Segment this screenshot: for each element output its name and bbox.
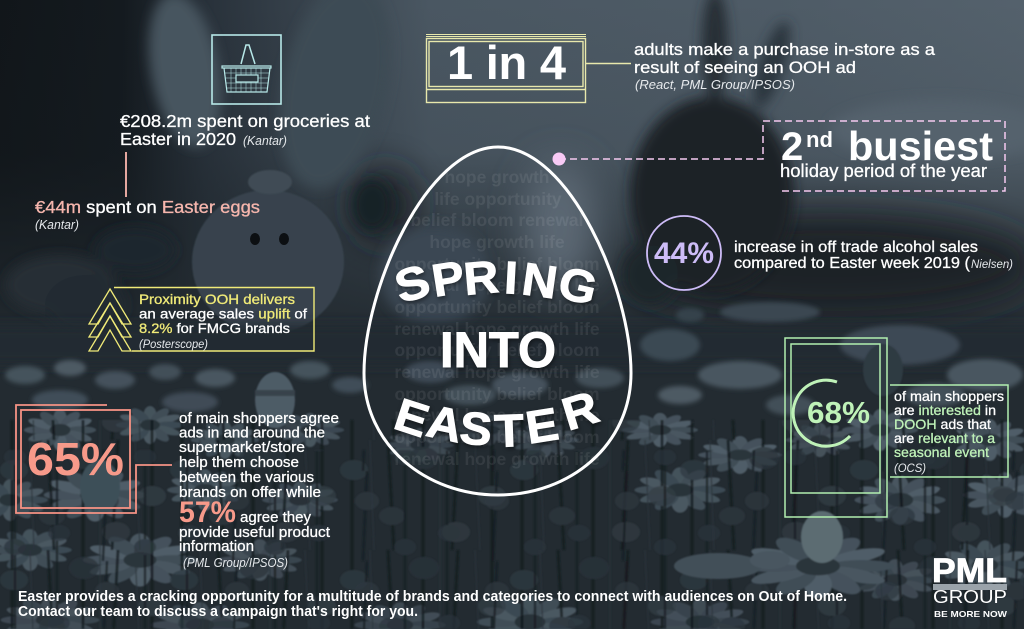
ghost word pattern inside egg: hope growth life xyxy=(429,232,565,252)
stat: alcohol sales text: increase in off trade alcohol sales xyxy=(734,239,978,256)
title: Spring Into Easter: S xyxy=(458,401,494,456)
stat: shoppers choose brands text xyxy=(179,410,339,570)
ghost word pattern inside egg: renewal hope growth life xyxy=(394,405,600,425)
stat: DOOH interest text: of main shoppers xyxy=(894,388,1004,404)
title: Spring Into Easter: S xyxy=(389,255,436,314)
closing message: Contact our team to discuss a campaign that's right for you. xyxy=(18,604,418,620)
title: Spring Into Easter: E xyxy=(389,388,435,447)
stat: shoppers choose brands text: between the various xyxy=(179,469,314,486)
logo: PML Group: BE MORE NOW xyxy=(934,609,1008,619)
stat: groceries spend: Easter in 2020 xyxy=(120,129,236,149)
title: Spring Into Easter: R xyxy=(461,250,501,305)
panel: 1 in 4 box xyxy=(426,34,631,102)
closing message xyxy=(18,589,847,620)
title: Spring Into Easter: E xyxy=(522,397,562,453)
stat: groceries spend: (Kantar) xyxy=(243,133,287,148)
title: Spring Into Easter: R xyxy=(556,381,604,440)
stat: shoppers choose brands text: brands on offer while xyxy=(179,484,321,501)
stat: DOOH interest text: are interested in xyxy=(894,402,996,418)
ghost word pattern inside egg: belief bloom renewal xyxy=(410,210,584,230)
stat: in-store purchase text: (React, PML Group/IPSOS) xyxy=(635,77,795,92)
closing message: Easter provides a cracking opportunity for a multitude of brands and categories to connect with audiences on Out of Home. xyxy=(18,589,847,605)
panel: 68% frame and arc xyxy=(785,338,887,517)
stat: shoppers choose brands text: agree they xyxy=(240,509,311,526)
title: Spring Into Easter: I xyxy=(503,251,519,304)
stat: 44% circle xyxy=(647,216,721,290)
icon: triple up chevrons xyxy=(89,289,131,351)
panel: proximity OOH uplift xyxy=(89,288,314,351)
panel: 2nd busiest dashed box: holiday period of the year xyxy=(780,161,987,181)
stat: shoppers choose brands text: ads in and around the xyxy=(179,424,325,442)
panel: proximity OOH uplift: Proximity OOH delivers xyxy=(139,291,295,307)
stat: Easter eggs spend: €44m spent on Easter eggs xyxy=(35,197,260,217)
stat: shoppers choose brands text: of main shoppers agree xyxy=(179,410,339,427)
title: Spring Into Easter xyxy=(389,250,604,457)
stat: Easter eggs spend: (Kantar) xyxy=(35,217,79,232)
panel: 1 in 4 box: 1 in 4 xyxy=(447,36,566,89)
stat: groceries spend: €208.2m spent on groceries at xyxy=(120,111,370,131)
panel: 65% box: 65% xyxy=(27,433,124,485)
panel: 65% box xyxy=(16,405,172,513)
stat: in-store purchase text: result of seeing an OOH ad xyxy=(634,58,856,77)
stat: in-store purchase text: adults make a purchase in-store as a xyxy=(634,40,936,59)
stat: DOOH interest text: (OCS) xyxy=(894,461,926,475)
ghost word pattern inside egg: opportunity belief bloom xyxy=(394,297,600,317)
panel: 2nd busiest dashed box xyxy=(552,121,1005,191)
stat: shoppers choose brands text: information xyxy=(179,538,254,555)
ghost word pattern inside egg: hope growth xyxy=(445,167,549,187)
stat: 44% circle: 44% xyxy=(654,237,714,270)
stat: in-store purchase text xyxy=(634,40,936,92)
stat: groceries spend xyxy=(120,111,370,149)
ghost word pattern inside egg xyxy=(394,167,600,469)
panel: 68% frame and arc: 68% xyxy=(807,395,870,430)
connector: groceries to eggs xyxy=(125,152,127,197)
stat: DOOH interest text xyxy=(890,385,1008,477)
title: Spring Into Easter: INTO xyxy=(440,322,556,378)
stat: shoppers choose brands text: provide useful product xyxy=(179,524,331,541)
stat: alcohol sales text: compared to Easter week 2019 ( xyxy=(734,255,971,272)
logo: PML Group xyxy=(932,552,1008,619)
panel: proximity OOH uplift: an average sales uplift of xyxy=(139,306,307,322)
stat: alcohol sales text: Nielsen) xyxy=(971,257,1013,271)
panel: 2nd busiest dashed box: busiest xyxy=(848,123,993,169)
panel: 2nd busiest dashed box: nd xyxy=(806,127,833,152)
meadow xyxy=(0,345,1024,629)
stat: alcohol sales text xyxy=(734,239,1013,272)
ghost word pattern inside egg: opportunity belief bloom xyxy=(394,427,600,447)
icon: shopping basket in square xyxy=(212,35,281,104)
title: Spring Into Easter: G xyxy=(554,256,602,315)
panel: proximity OOH uplift: 8.2% for FMCG brands xyxy=(139,320,290,336)
title: Spring Into Easter: N xyxy=(519,252,561,308)
ghost word pattern inside egg: life opportunity xyxy=(434,189,562,209)
ghost word pattern inside egg: opportunity belief bloom xyxy=(394,254,600,274)
stat: DOOH interest text: DOOH ads that xyxy=(894,416,991,432)
stat: DOOH interest text: seasonal event xyxy=(894,444,989,460)
toy bunny head xyxy=(192,170,344,334)
title: Spring Into Easter: P xyxy=(428,250,468,306)
title: Spring Into Easter: A xyxy=(422,394,467,452)
stat: shoppers choose brands text: supermarket/store xyxy=(179,439,305,456)
stat: shoppers choose brands text: 57% xyxy=(179,496,236,529)
ghost word pattern inside egg: opportunity belief bloom xyxy=(394,384,600,404)
stat: shoppers choose brands text: help them choose xyxy=(179,454,299,471)
central egg outline xyxy=(364,147,631,495)
logo: PML Group: GROUP xyxy=(933,587,1007,607)
panel: 2nd busiest dashed box: 2 xyxy=(781,125,803,169)
ghost word pattern inside egg: renewal hope growth life xyxy=(394,275,600,295)
ghost word pattern inside egg: renewal hope growth life xyxy=(394,319,600,339)
logo: PML Group: PML xyxy=(932,552,1007,590)
ghost word pattern inside egg: renewal hope growth life xyxy=(394,449,600,469)
ghost word pattern inside egg: renewal hope growth life xyxy=(394,362,600,382)
stat: Easter eggs spend xyxy=(35,197,260,232)
stat: DOOH interest text: are relevant to a xyxy=(894,430,995,446)
panel: proximity OOH uplift: (Posterscope) xyxy=(139,337,208,351)
ghost word pattern inside egg: opportunity belief bloom xyxy=(394,340,600,360)
stat: shoppers choose brands text: (PML Group/IPSOS) xyxy=(183,555,288,570)
title: Spring Into Easter: T xyxy=(493,404,525,457)
